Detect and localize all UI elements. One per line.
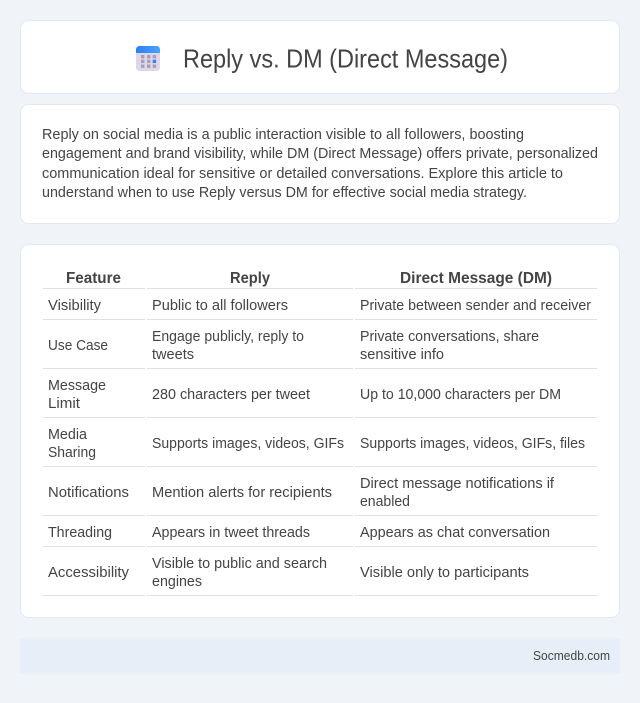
row: threading xyxy=(43,525,597,547)
footer credit: Socmedb.com xyxy=(533,649,610,663)
row: notifications: Notifications xyxy=(48,485,129,501)
table header row: Reply xyxy=(230,270,270,287)
row: media sharing: Supports images, videos, GIFs, files xyxy=(360,436,585,452)
row: accessibility: Visible to public and search xyxy=(152,556,327,572)
row: message limit xyxy=(43,378,597,418)
row: message limit: Up to 10,000 characters per DM xyxy=(360,387,561,403)
row: threading: Appears in tweet threads xyxy=(152,525,310,541)
row: use case: Engage publicly, reply to xyxy=(152,329,304,345)
row: visibility: Public to all followers xyxy=(152,298,288,314)
row: threading: Threading xyxy=(48,525,112,541)
row: notifications: Mention alerts for recipients xyxy=(152,485,332,501)
row: visibility: Private between sender and receiver xyxy=(360,298,591,314)
footer xyxy=(20,639,620,673)
table header row: Direct Message (DM) xyxy=(400,270,552,287)
row: accessibility: Accessibility xyxy=(48,565,130,581)
intro text: Reply on social media is a public interaction visible to all followers, boosting xyxy=(42,127,524,143)
panel: title card xyxy=(20,20,620,94)
row: use case xyxy=(43,329,597,369)
row: notifications: enabled xyxy=(360,494,410,510)
row: media sharing xyxy=(43,427,597,467)
panel: comparison table xyxy=(20,244,620,618)
icon: calendar xyxy=(136,46,160,71)
row: accessibility xyxy=(43,556,597,596)
row: accessibility: Visible only to participants xyxy=(360,565,529,581)
intro text: communication ideal for sensitive or detailed conversations. Explore this article to xyxy=(42,166,563,182)
row: media sharing: Sharing xyxy=(48,445,96,461)
table header row: Feature xyxy=(66,270,121,287)
row: threading: Appears as chat conversation xyxy=(360,525,550,541)
row: use case: sensitive info xyxy=(360,347,444,363)
row: message limit: Limit xyxy=(48,396,80,412)
row: accessibility: engines xyxy=(152,574,202,590)
intro text: understand when to use Reply versus DM for effective social media strategy. xyxy=(42,185,527,201)
row: use case: tweets xyxy=(152,347,194,363)
row: use case: Private conversations, share xyxy=(360,329,539,345)
panel: intro paragraph xyxy=(20,104,620,224)
row: message limit: Message xyxy=(48,378,106,394)
row: media sharing: Media xyxy=(48,427,88,443)
table header row xyxy=(43,270,597,289)
row: use case: Use Case xyxy=(48,338,108,354)
intro text xyxy=(42,127,598,201)
row: notifications: Direct message notifications if xyxy=(360,476,555,492)
row: visibility: Visibility xyxy=(48,298,102,314)
intro text: engagement and brand visibility, while DM (Direct Message) offers private, personalized xyxy=(42,146,598,162)
row: message limit: 280 characters per tweet xyxy=(152,387,310,403)
row: visibility xyxy=(43,298,597,320)
row: notifications xyxy=(43,476,597,516)
row: media sharing: Supports images, videos, GIFs xyxy=(152,436,344,452)
title: Reply vs. DM (Direct Message) xyxy=(183,46,508,74)
